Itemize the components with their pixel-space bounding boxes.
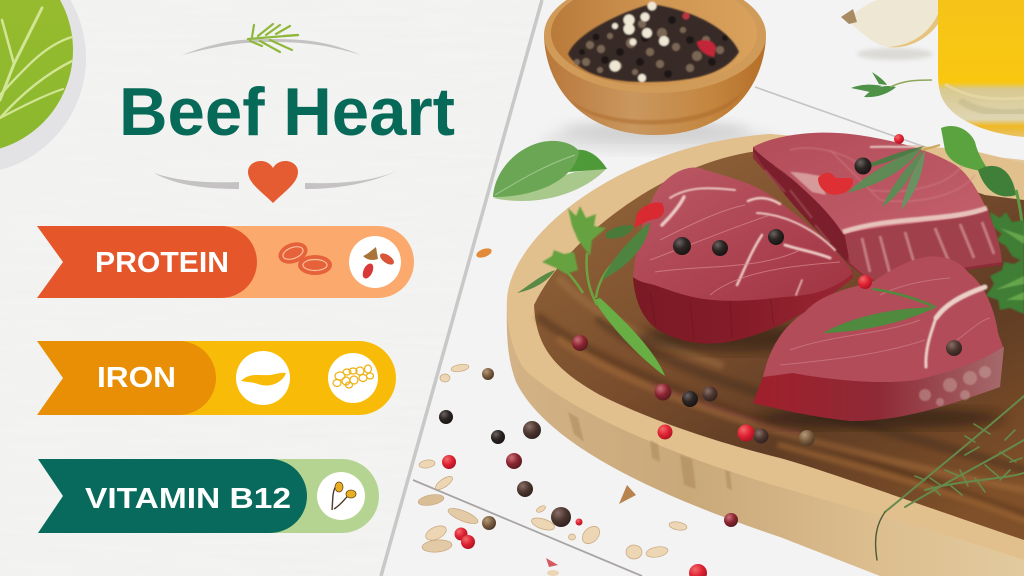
- meat shadows: [635, 324, 1005, 428]
- wood grain: [540, 280, 1024, 520]
- thyme sprig: [876, 396, 1024, 560]
- meat slice: bottom right: [753, 256, 1004, 421]
- left paper panel: [379, 0, 544, 576]
- garlic clove: [841, 0, 938, 60]
- wood side patches: [568, 412, 732, 490]
- icon: beans circle: [349, 236, 401, 288]
- decorative arc with rosemary: [182, 24, 361, 55]
- icon: rosemary sprig: [248, 24, 298, 52]
- ribbon: iron: [37, 341, 396, 415]
- peppercorns and flakes scattered on table: [417, 247, 738, 576]
- parsley and basil at right: [941, 126, 1024, 314]
- herb sprig near glass: [851, 72, 932, 97]
- icon: nerve cells circle: [317, 472, 365, 520]
- ribbon: protein: PROTEIN: [95, 247, 229, 279]
- ribbon: iron: IRON: [97, 362, 176, 394]
- meat slice: top right: [753, 133, 1003, 280]
- wooden cutting board: [507, 134, 1024, 576]
- peppercorns on meat and board: [572, 134, 962, 446]
- peppercorn pile: [568, 2, 739, 82]
- heart divider: [154, 161, 397, 203]
- meat slice: left: [633, 167, 853, 344]
- icon: liver slice circle: [236, 351, 290, 405]
- ribbon: vitamin b12: VITAMIN B12: [85, 483, 291, 515]
- herb sprig on board: [517, 206, 665, 376]
- icon: blood cells: [275, 238, 332, 275]
- glass of oil: [938, 0, 1024, 137]
- basil leaf on table: [493, 141, 607, 201]
- ribbon: protein: [37, 226, 414, 298]
- title: Beef Heart: [119, 74, 455, 150]
- icon: cell cluster circle: [328, 353, 378, 403]
- leaf badge: [0, 0, 86, 174]
- wooden bowl of peppercorns: [544, 0, 766, 140]
- icon: heart: [248, 161, 298, 203]
- rosemary on bottom slice: [823, 289, 937, 333]
- ribbon: vitamin b12: [38, 459, 379, 533]
- meat side fibers: [844, 208, 1002, 280]
- rosemary on top slice: [847, 145, 940, 210]
